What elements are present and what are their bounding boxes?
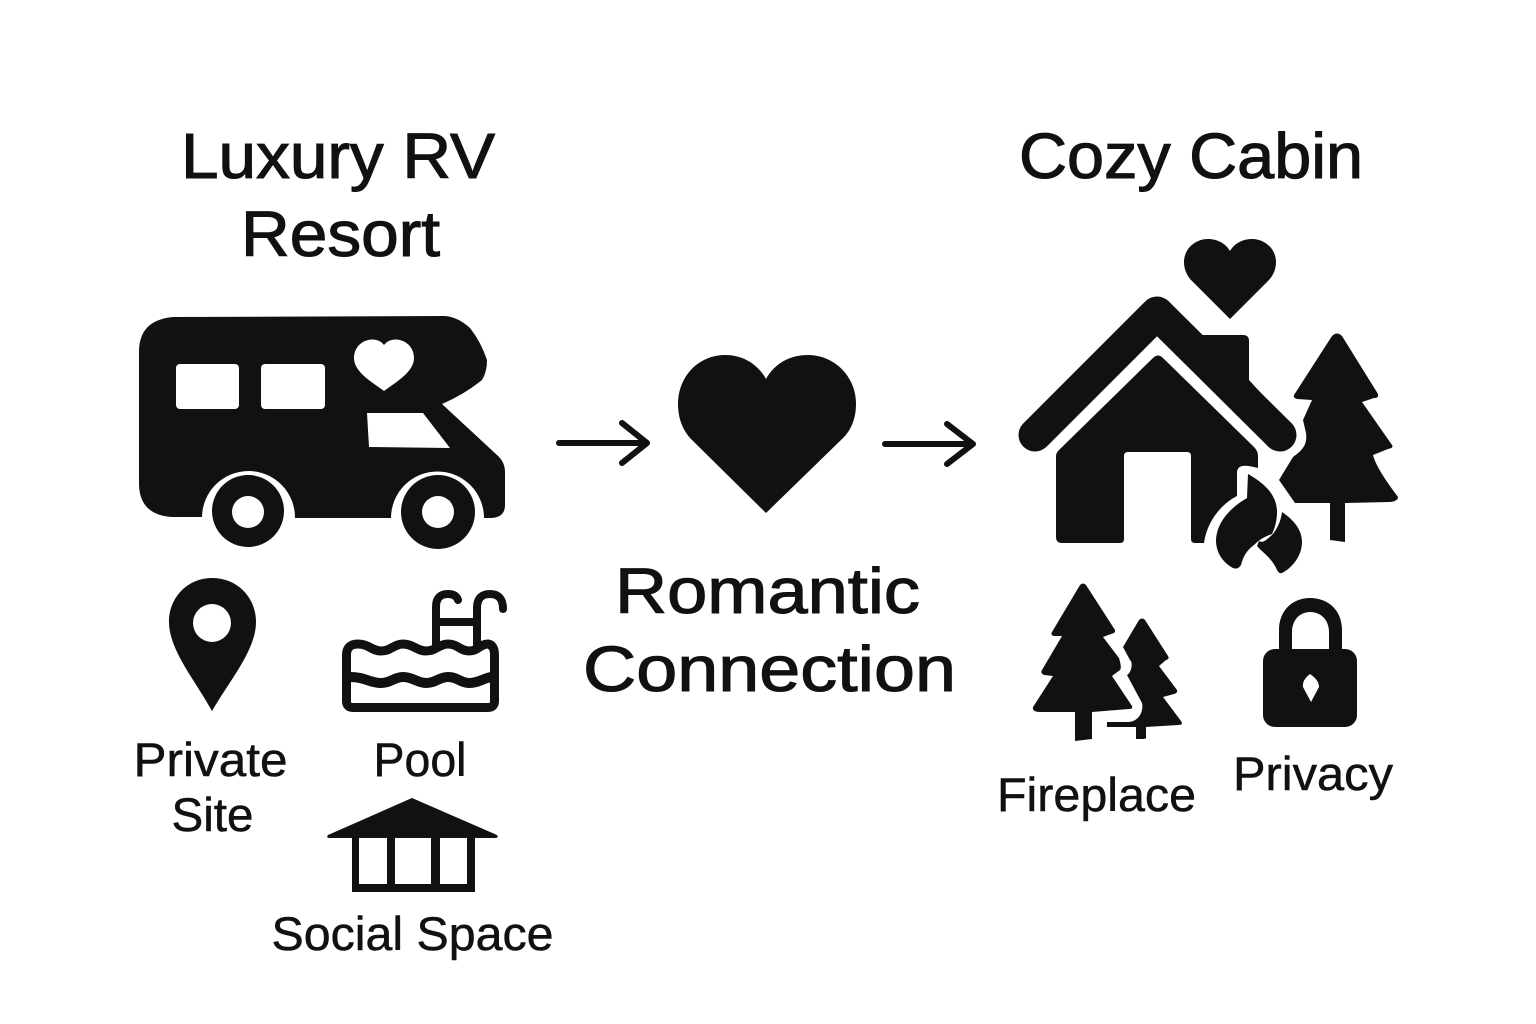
label: Private Site: Private: [134, 733, 288, 786]
heading: Luxury RV Resort: Resort: [241, 198, 440, 270]
icon: cabin roof: [1035, 313, 1280, 435]
icon: padlock: [1263, 598, 1357, 727]
icon: forest: [1033, 584, 1182, 741]
label: Social Space: Social Space: [272, 907, 554, 960]
label: Private Site: [134, 733, 288, 841]
heading: Cozy Cabin: Cozy Cabin: [1019, 120, 1363, 192]
heading: Luxury RV Resort: Luxury RV: [181, 120, 495, 192]
icon: cabin tree: [1279, 334, 1398, 542]
icon: map pin: [169, 578, 256, 711]
heading: Romantic Connection: [583, 555, 956, 705]
icon: pool: [346, 594, 503, 708]
arrow: heart to cabin: [885, 424, 973, 464]
pool basin: [346, 644, 494, 708]
heading: Romantic Connection: Romantic: [615, 555, 920, 627]
icon: central heart: [678, 355, 856, 513]
label: Pool: Pool: [374, 733, 466, 786]
icon: cabin heart: [1184, 239, 1276, 319]
arrow: RV to heart: [559, 423, 647, 463]
icon: social space pavilion: [327, 798, 498, 892]
heading: Luxury RV Resort: [181, 120, 495, 270]
icon: RV camper: [139, 316, 505, 549]
icon: cabin body: [1056, 356, 1258, 543]
heading: Romantic Connection: Connection: [583, 633, 956, 705]
icon: fire: [1216, 474, 1302, 573]
icon: cabin with heart, tree and fire: [1035, 239, 1398, 573]
label: Fireplace: Fireplace: [997, 768, 1196, 821]
label: Private Site: Site: [172, 788, 254, 841]
pool ladder: [436, 594, 458, 645]
label: Privacy: Privacy: [1233, 747, 1394, 800]
